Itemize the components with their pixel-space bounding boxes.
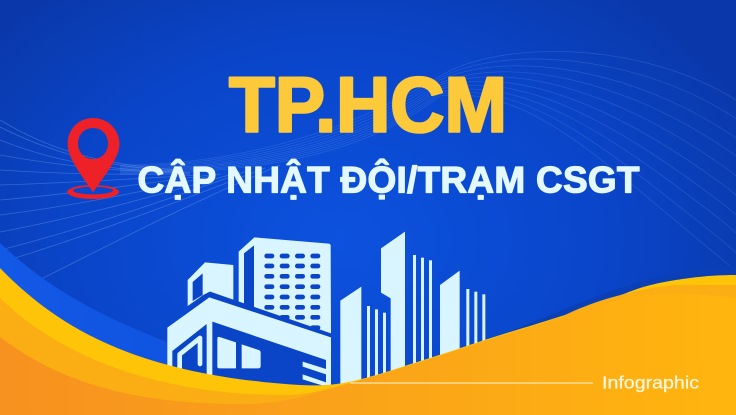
band: dark blue above right wave xyxy=(500,266,736,345)
building: front low block xyxy=(167,292,331,387)
footer label: Infographic xyxy=(602,372,699,392)
illustration: city buildings xyxy=(167,232,485,387)
building: tall tower with windows xyxy=(239,237,331,335)
wave: amber middle layer xyxy=(0,285,736,415)
footer rule xyxy=(350,382,593,384)
wave: orange main layer xyxy=(0,294,736,415)
title: TP.HCM xyxy=(229,60,507,148)
wave lines: right xyxy=(120,51,736,272)
subtitle: CẬP NHẬT ĐỘI/TRẠM CSGT xyxy=(138,158,640,200)
tower windows xyxy=(264,254,320,330)
wave lines: left xyxy=(0,120,280,278)
building: right skyline tower A xyxy=(340,287,386,387)
building: right skyline tower C xyxy=(440,271,485,357)
band: lighter blue above left wave xyxy=(0,243,340,400)
icon: location pin xyxy=(67,118,120,199)
building: small back block xyxy=(188,262,233,306)
wave: yellow top layer xyxy=(0,268,736,415)
building: right skyline tower B xyxy=(381,232,432,373)
